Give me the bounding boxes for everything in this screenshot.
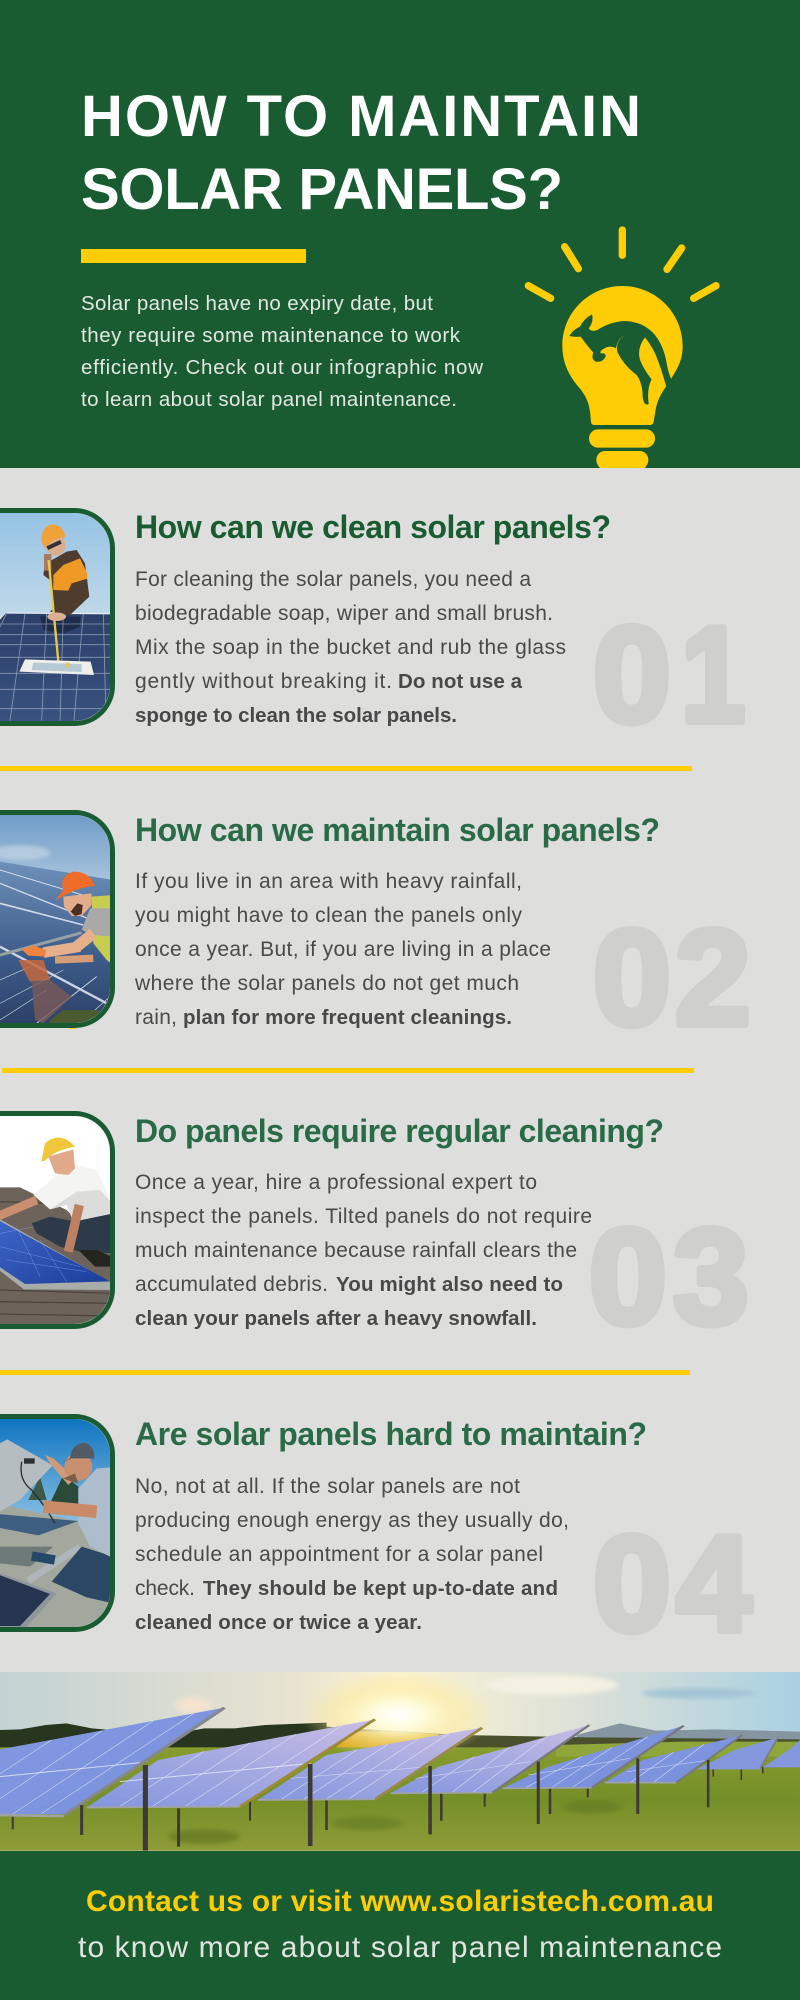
photo: worker in orange helmet bbox=[0, 810, 117, 1029]
heading: How can we maintain solar panels? bbox=[135, 812, 660, 848]
photo frame bbox=[0, 1416, 112, 1630]
title: HOW TO MAINTAIN bbox=[81, 84, 641, 149]
body text: biodegradable soap, wiper and small brush. bbox=[135, 602, 553, 625]
number 04: 4 bbox=[676, 1508, 752, 1660]
divider 3 bbox=[0, 1370, 690, 1375]
body text: plan for more frequent cleanings. bbox=[183, 1006, 512, 1029]
photo frame bbox=[0, 1114, 112, 1326]
section 3 panel bbox=[0, 1111, 747, 1329]
photo: worker mopping solar panel bbox=[0, 507, 117, 724]
divider 1 bbox=[0, 766, 692, 771]
photo frame bbox=[0, 812, 112, 1026]
body text: inspect the panels. Tilted panels do not require bbox=[135, 1205, 592, 1228]
intro text bbox=[81, 292, 483, 411]
number 01 bbox=[593, 599, 745, 751]
number 03 bbox=[589, 1200, 749, 1353]
photo: worker wiring a panel bbox=[0, 1413, 117, 1631]
body text: clean your panels after a heavy snowfall. bbox=[135, 1307, 537, 1330]
number 01: 0 bbox=[593, 599, 671, 751]
divider 2 bbox=[2, 1068, 694, 1073]
body text: If you live in an area with heavy rainfall, bbox=[135, 870, 522, 893]
intro text: Solar panels have no expiry date, but bbox=[81, 292, 433, 315]
number 03: 0 bbox=[589, 1201, 667, 1353]
body text bbox=[134, 870, 551, 1029]
icon: light bulb with kangaroo bbox=[528, 230, 716, 468]
body text: sponge to clean the solar panels. bbox=[135, 704, 457, 727]
body text: Once a year, hire a professional expert to bbox=[135, 1171, 537, 1194]
heading: How can we clean solar panels? bbox=[135, 509, 611, 545]
body text bbox=[135, 568, 566, 727]
front panel bbox=[0, 1708, 224, 1814]
footer call to action: Contact us or visit www.solaristech.com.au bbox=[86, 1885, 714, 1918]
body text: Mix the soap in the bucket and rub the glass bbox=[135, 636, 566, 659]
heading: Are solar panels hard to maintain? bbox=[135, 1416, 647, 1452]
photo: solar farm at sunset bbox=[0, 1670, 800, 1851]
body text: Do not use a bbox=[398, 670, 523, 693]
body text: check. bbox=[135, 1577, 195, 1600]
body text bbox=[135, 1475, 569, 1634]
section 2 panel bbox=[0, 810, 748, 1030]
body text: accumulated debris. bbox=[135, 1273, 328, 1296]
section 4 panel bbox=[0, 1413, 752, 1660]
heading: Do panels require regular cleaning? bbox=[135, 1113, 664, 1149]
intro text: they require some maintenance to work bbox=[81, 324, 461, 347]
body text: much maintenance because rainfall clears the bbox=[135, 1239, 577, 1262]
body text: You might also need to bbox=[336, 1273, 563, 1296]
number 04 bbox=[593, 1508, 752, 1660]
far panels bbox=[763, 1740, 800, 1767]
section 1 panel bbox=[0, 508, 745, 726]
body text bbox=[135, 1171, 592, 1330]
title bbox=[81, 84, 641, 222]
yellow title bar bbox=[81, 249, 306, 263]
number 02: 2 bbox=[675, 902, 751, 1054]
body text: rain, bbox=[135, 1006, 177, 1029]
number 03: 3 bbox=[673, 1200, 749, 1352]
number 02: 0 bbox=[593, 902, 671, 1054]
footer note: to know more about solar panel maintenance bbox=[78, 1931, 722, 1964]
body text: where the solar panels do not get much bbox=[134, 972, 519, 995]
body text: once a year. But, if you are living in a place bbox=[135, 938, 551, 961]
number 04: 0 bbox=[593, 1508, 671, 1660]
intro text: efficiently. Check out our infographic now bbox=[81, 356, 483, 379]
intro text: to learn about solar panel maintenance. bbox=[81, 388, 457, 411]
body text: cleaned once or twice a year. bbox=[135, 1611, 422, 1634]
middle panels bbox=[258, 1728, 482, 1800]
body text: For cleaning the solar panels, you need a bbox=[135, 568, 531, 591]
number 02 bbox=[593, 902, 751, 1054]
body text: gently without breaking it. bbox=[135, 670, 392, 693]
footer panel bbox=[0, 1851, 800, 2000]
body text: No, not at all. If the solar panels are not bbox=[135, 1475, 520, 1498]
photo: worker in yellow hard hat bbox=[0, 1110, 117, 1330]
header panel bbox=[0, 0, 800, 468]
body text: schedule an appointment for a solar panel bbox=[135, 1543, 543, 1566]
title: SOLAR PANELS? bbox=[81, 157, 563, 222]
body text: They should be kept up-to-date and bbox=[203, 1577, 558, 1600]
body text: producing enough energy as they usually do, bbox=[135, 1509, 569, 1532]
photo frame bbox=[0, 510, 112, 724]
number 01: 1 bbox=[681, 599, 745, 751]
body text: you might have to clean the panels only bbox=[135, 904, 522, 927]
